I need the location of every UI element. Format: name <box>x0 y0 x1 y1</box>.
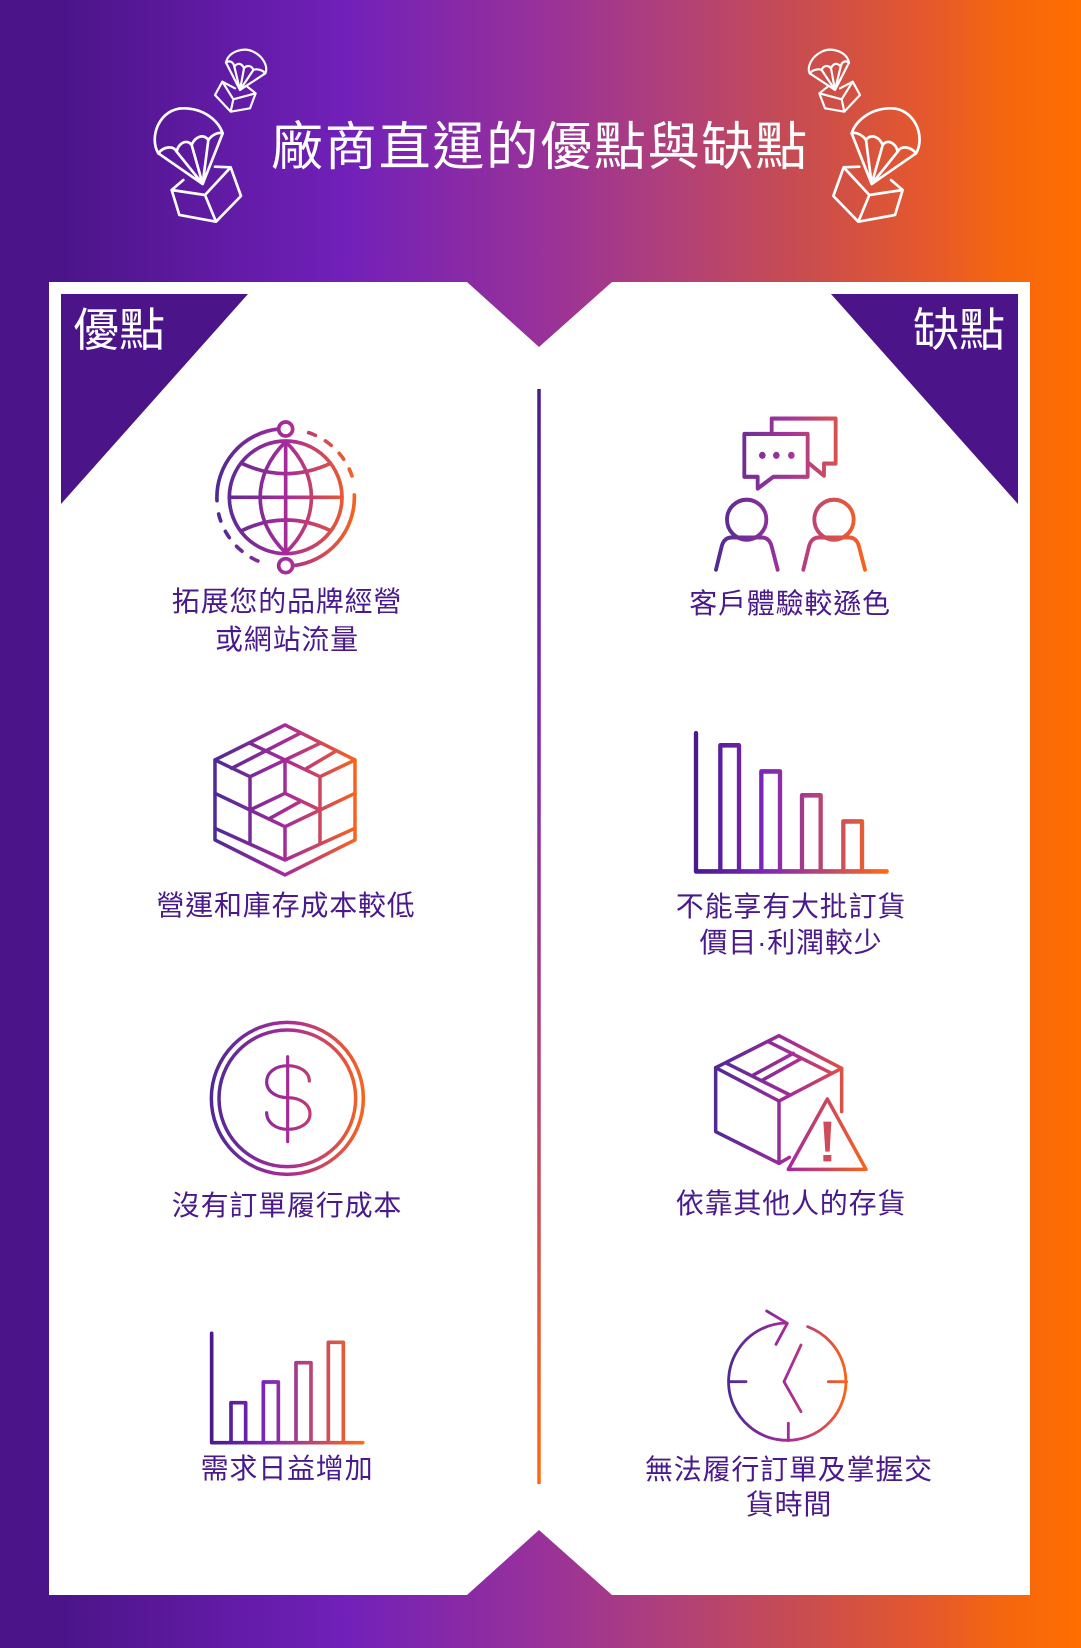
heading: advantages: 優點 <box>73 304 165 356</box>
text: growing demand: 需求日益增加 <box>201 1453 373 1484</box>
text: rely on inventory: 依靠其他人的存貨 <box>676 1188 906 1219</box>
center divider line <box>537 389 541 1484</box>
icon: stacked boxes <box>215 725 355 875</box>
icon: large parachute box right <box>833 108 920 222</box>
heading: disadvantages: 缺點 <box>913 304 1005 356</box>
ribbon: advantages corner <box>61 294 248 504</box>
text: no fulfillment cost: 沒有訂單履行成本 <box>172 1190 402 1221</box>
icon: falling bar chart <box>696 733 887 871</box>
text: no bulk pricing <box>676 891 906 958</box>
text: no bulk pricing: 價目·利潤較少 <box>700 927 882 958</box>
icon: chat between two people <box>716 419 865 570</box>
icon: small parachute box left <box>215 50 266 112</box>
text: cannot control fulfillment <box>645 1454 933 1520</box>
text: cannot control fulfillment: 無法履行訂單及掌握交 <box>645 1454 933 1485</box>
text: lower costs: 營運和庫存成本較低 <box>156 890 416 921</box>
icon: large parachute box left <box>155 108 241 222</box>
icon: clock with arrow <box>729 1311 847 1441</box>
text: expand brand: 或網站流量 <box>215 624 359 655</box>
icon: rising bar chart <box>212 1333 363 1443</box>
text: expand brand <box>172 586 402 655</box>
text: customer experience: 客戶體驗較遜色 <box>689 588 891 619</box>
icon: dollar coin <box>211 1022 363 1174</box>
text: no bulk pricing: 不能享有大批訂貨 <box>676 891 906 922</box>
icon: box with warning triangle <box>716 1036 866 1169</box>
white content panel with notches <box>49 282 1030 1595</box>
text: cannot control fulfillment: 貨時間 <box>746 1489 832 1520</box>
icon: globe with orbit <box>217 422 354 573</box>
title: 廠商直運的優點與缺點 <box>271 119 809 177</box>
ribbon: disadvantages corner <box>831 294 1018 504</box>
text: expand brand: 拓展您的品牌經營 <box>172 586 402 617</box>
icon: small parachute box right <box>809 50 860 112</box>
